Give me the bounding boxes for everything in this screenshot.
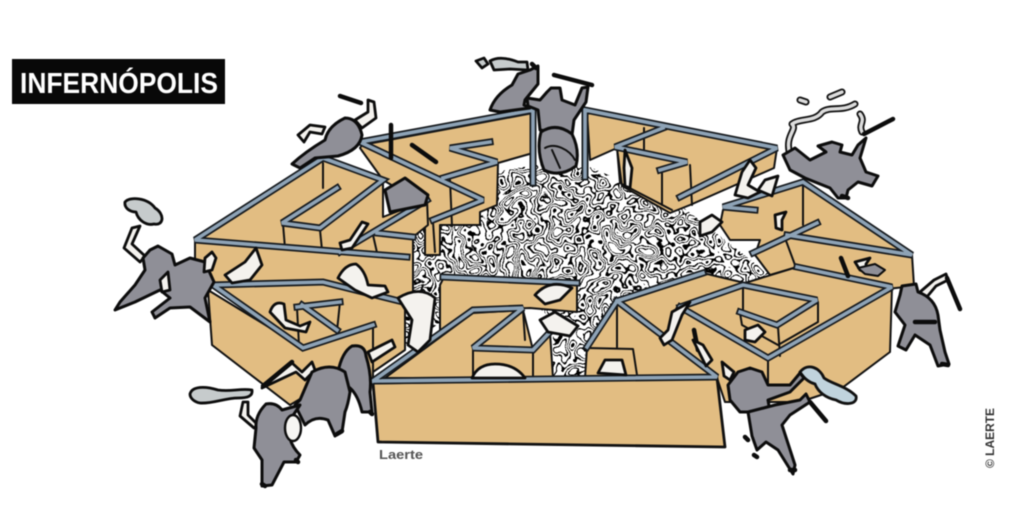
tear gas smoke [476, 58, 528, 70]
people scattered in the corridors [225, 125, 885, 378]
maze walls [195, 112, 914, 447]
wall block: top right [587, 112, 777, 213]
riot police: bottom left [190, 340, 395, 486]
riot police: top left [292, 96, 376, 168]
wall block: lower right [617, 267, 892, 402]
wall block: top left [360, 113, 533, 255]
tear gas smoke [125, 199, 162, 224]
wall face: lower left front [208, 290, 373, 405]
tear gas smoke [190, 387, 252, 403]
wall top rims [195, 110, 912, 381]
wall block: lower left back [213, 282, 405, 372]
wall block: upper left [195, 158, 428, 303]
riot police: bottom right [693, 340, 856, 474]
wall block: upper right [720, 182, 914, 289]
cartoon: Infernópolis [11, 56, 995, 489]
front wall [373, 378, 725, 447]
copyright signature, vertical: © LAERTE [983, 408, 997, 468]
riot police: left [115, 199, 216, 322]
crowd of people at the centre of the maze [405, 164, 768, 376]
tear gas smoke [800, 367, 856, 403]
riot police: top centre [476, 58, 592, 173]
riot police: top right [783, 92, 893, 198]
riot police: right [895, 274, 960, 366]
artist credit: Laerte [379, 447, 423, 462]
title box: Infernópolis [12, 59, 225, 104]
full artwork [12, 58, 997, 486]
title box: Infernópolis: INFERNÓPOLIS [20, 66, 218, 100]
wall edges [283, 128, 818, 400]
wall block: centre [440, 279, 577, 332]
tear gas smoke [788, 92, 862, 155]
wall block: front triangle [385, 310, 553, 378]
wall block: front right box [585, 304, 712, 378]
